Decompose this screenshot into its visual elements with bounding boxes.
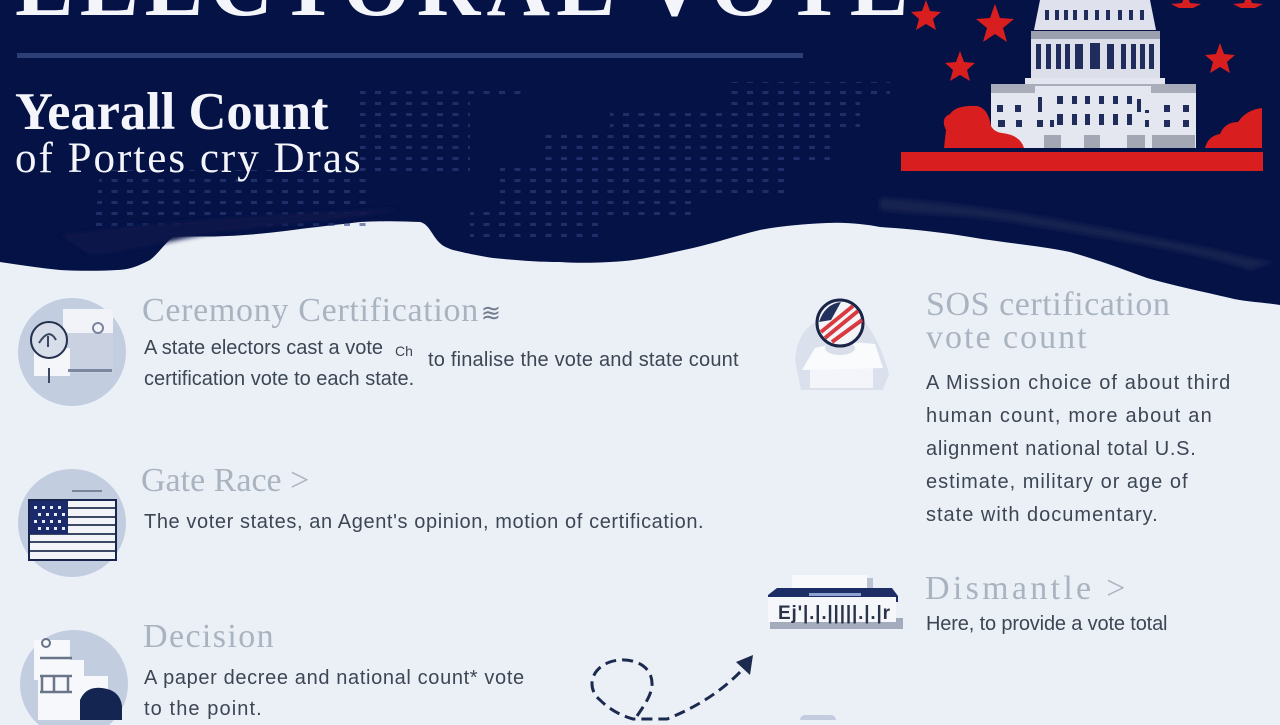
title divider: [17, 53, 803, 58]
subtitle: [15, 83, 363, 182]
item 1: body text: [144, 337, 739, 390]
item 1: body text: to finalise the vote and state count: [428, 349, 739, 371]
item 2: heading: Gate Race >: [141, 462, 309, 499]
item 1: body text: Ch: [395, 343, 413, 359]
world map dot pattern: [96, 82, 1266, 268]
item 3: body text: A paper decree and national count* vote: [144, 667, 525, 689]
item 1: icon document seal: [18, 298, 126, 406]
item 1: heading: Ceremony Certification≋: [142, 292, 501, 329]
item 4: heading: [926, 286, 1170, 356]
item 4: body text: [926, 372, 1231, 526]
item 4: body text: alignment national total U.S.: [926, 438, 1196, 460]
item 6: icon partial circle: [800, 715, 836, 720]
icon: capitol building with stars: [901, 0, 1263, 171]
item 1: body text: certification vote to each state.: [144, 368, 414, 390]
item 5: icon courthouse label: Ej'|.|.|||||.|.|r: [778, 603, 891, 624]
item 2: body text: The voter states, an Agent's opinion, motion of certification.: [144, 511, 704, 533]
item 5: body text: Here, to provide a vote total: [926, 613, 1167, 635]
subtitle: of Portes cry Dras: [15, 135, 363, 182]
item 4: body text: state with documentary.: [926, 504, 1159, 526]
item 3: body text: to the point.: [144, 698, 263, 720]
dashed arrow: [590, 655, 753, 720]
item 4: heading: vote count: [926, 319, 1089, 356]
item 4: body text: human count, more about an: [926, 405, 1213, 427]
item 1: body text: A state electors cast a vote: [144, 337, 383, 359]
item 5: heading: Dismantle >: [925, 570, 1129, 607]
item 4: body text: estimate, military or age of: [926, 471, 1189, 493]
item 3: body text: [144, 667, 525, 720]
item 3: heading: Decision: [143, 618, 275, 655]
item 4: body text: A Mission choice of about third: [926, 372, 1231, 394]
header background with wave edge: [0, 0, 1280, 305]
item 2: icon American flag: [18, 469, 126, 577]
item 5: icon courthouse label: [768, 575, 903, 629]
item 3: icon documents and person: [20, 630, 128, 725]
subtitle: Yearall Count: [15, 83, 329, 141]
item 4: icon ballot box with badge: [795, 298, 889, 390]
item 4: heading: SOS certification: [926, 286, 1170, 323]
